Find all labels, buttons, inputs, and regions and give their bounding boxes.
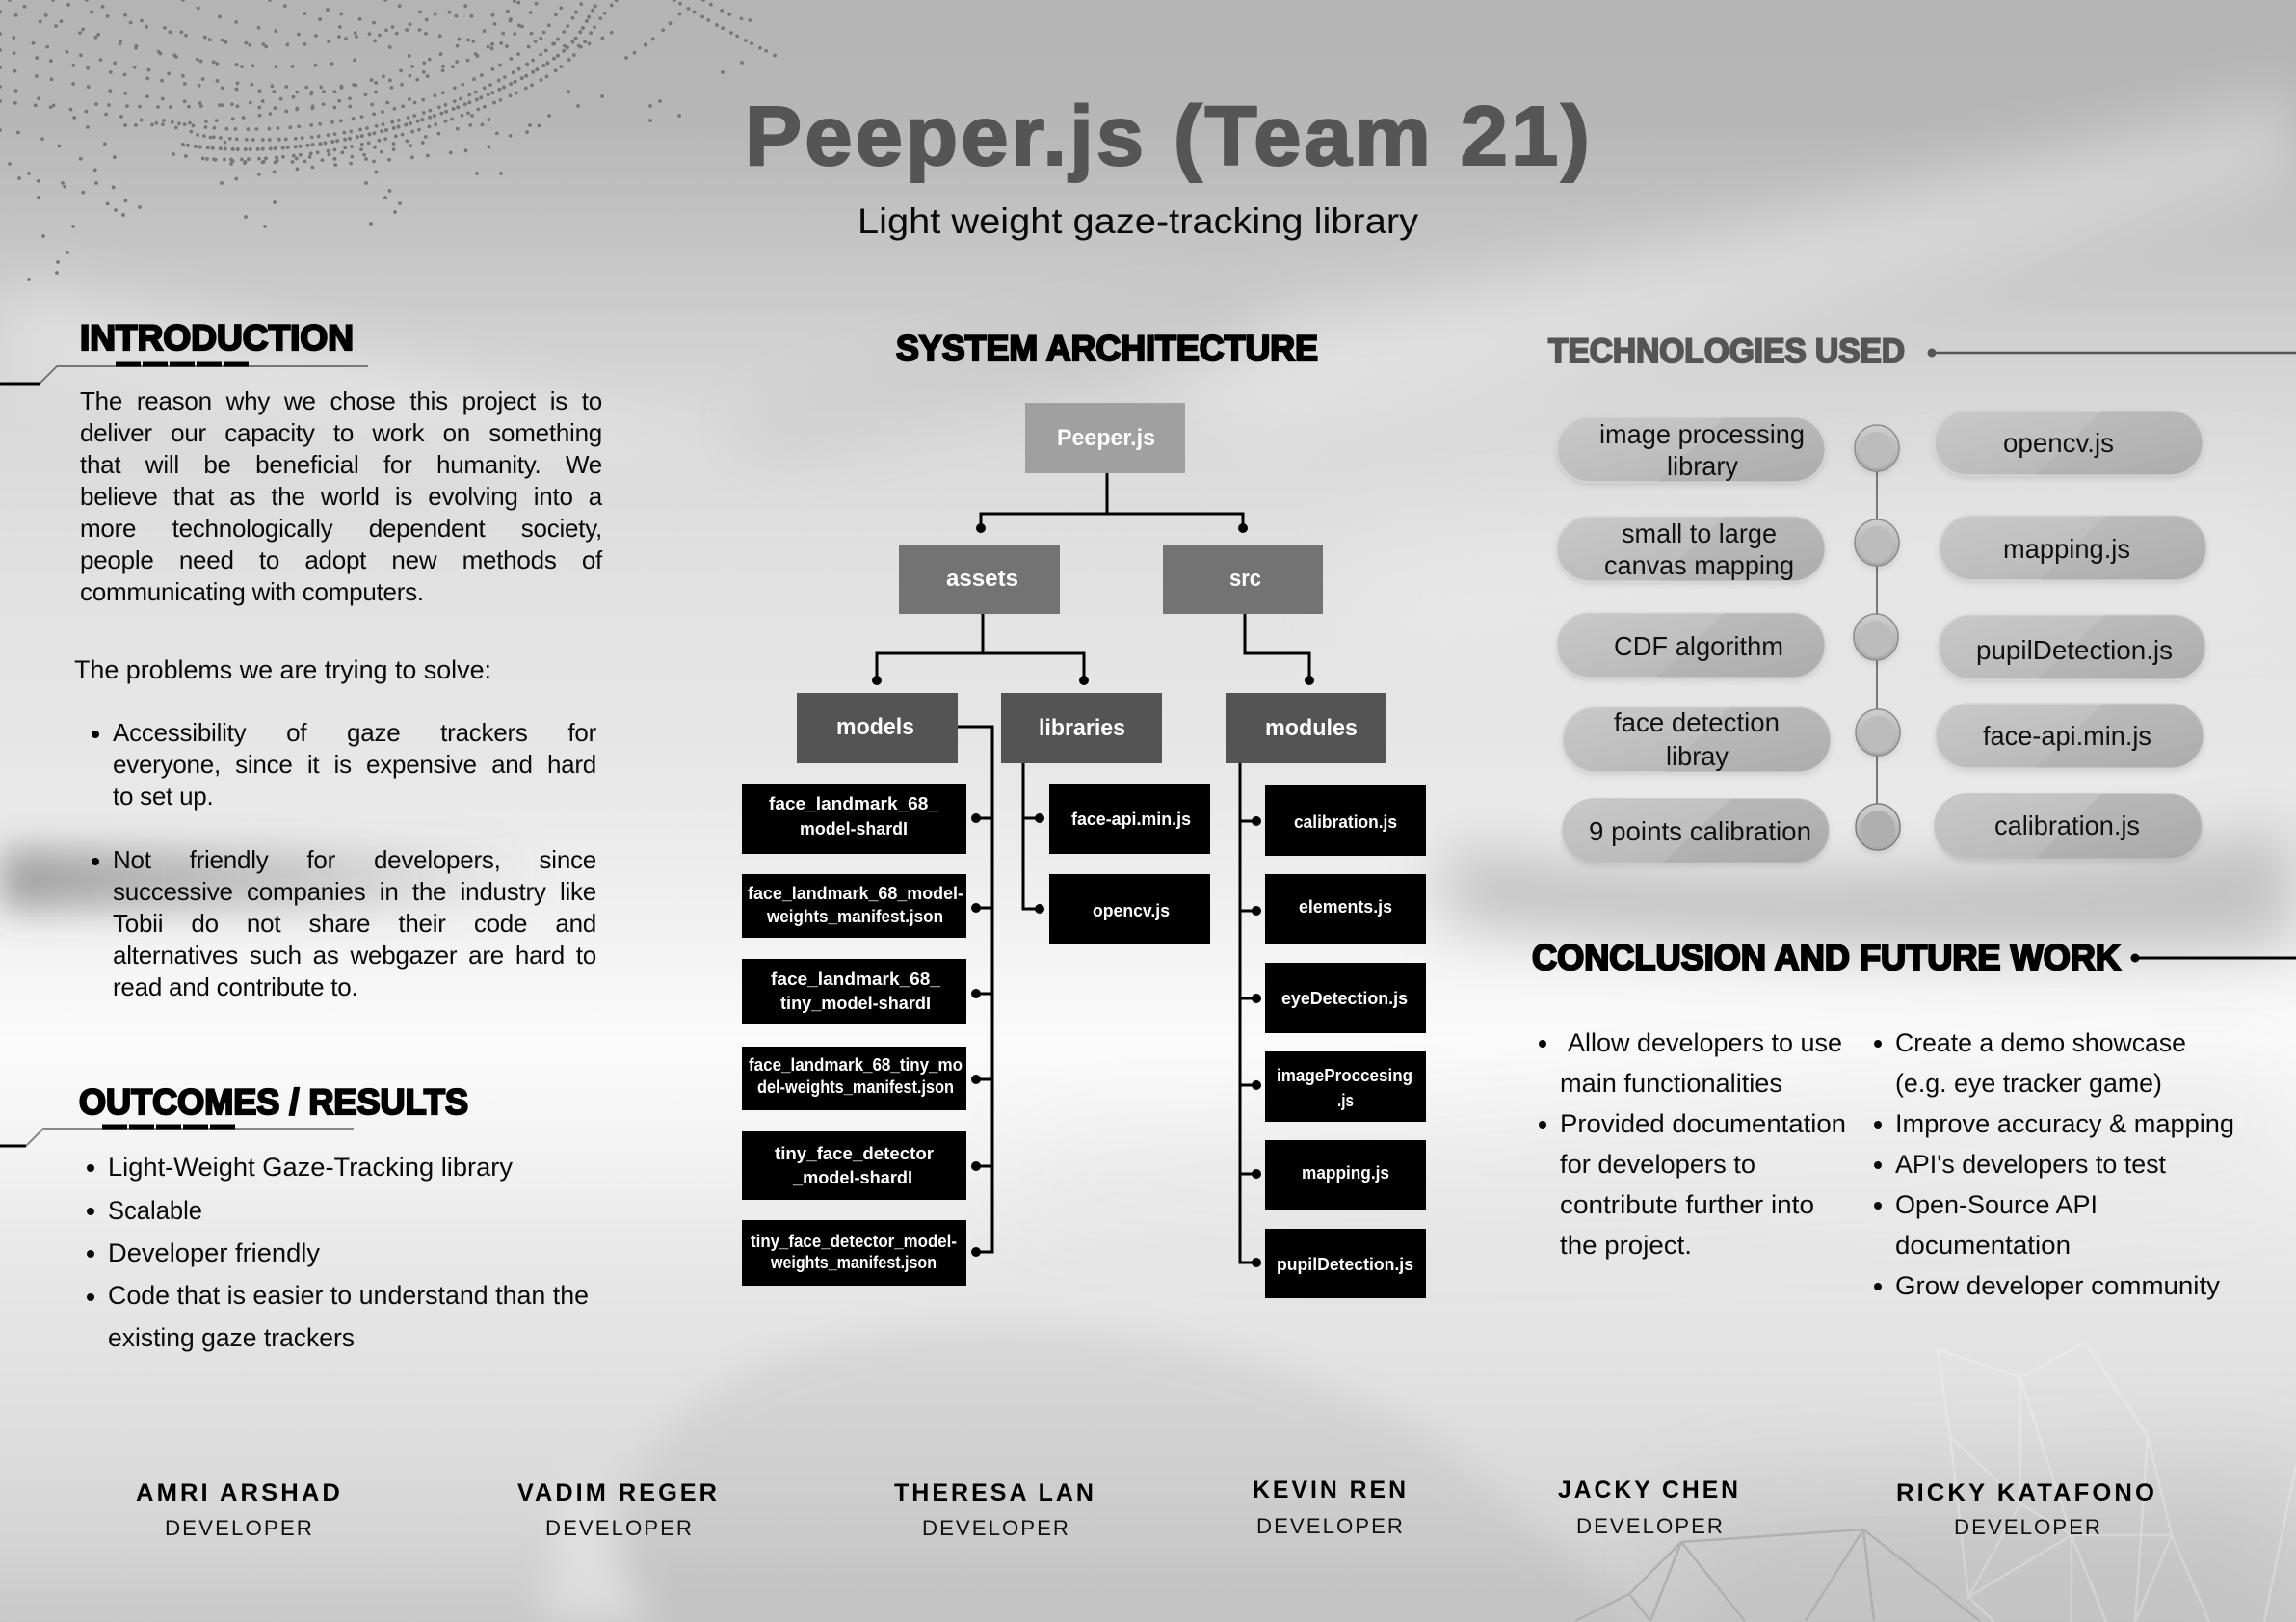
leaf: mapping.js: [1265, 1140, 1426, 1210]
leaf: imageProccesing.js: [1265, 1051, 1426, 1122]
node: src: src: [1229, 566, 1261, 592]
pill: face-api.min.js: [1936, 704, 2204, 768]
node: modules: [1226, 693, 1386, 763]
pill: small to large canvas mapping: canvas mapping: [1604, 550, 1794, 580]
outcomes list: existing gaze trackers: [108, 1323, 355, 1352]
pill: CDF algorithm: [1557, 613, 1825, 678]
team member: Theresa Lan: THERESA LAN: [894, 1479, 1096, 1506]
leaf: tiny_face_detector_model-weights_manifest.json: tiny_face_detector_model-: [751, 1232, 957, 1251]
bullet: not friendly: [92, 858, 99, 865]
outcomes list: Scalable: [108, 1196, 202, 1225]
team member: Amri Arshad: [136, 1479, 343, 1540]
future work list, right column: (e.g. eye tracker game): [1895, 1069, 2162, 1098]
leaf: face_landmark_68_tiny_model-weights_manifest.json: [742, 1047, 966, 1110]
team member: Ricky Katafono: RICKY KATAFONO: [1896, 1479, 2157, 1506]
team member: Ricky Katafono: [1896, 1479, 2157, 1539]
conclusion list, left column: for developers to: [1560, 1150, 1755, 1179]
leaf: face_landmark_68_model-shard1: face_landmark_68_: [769, 794, 939, 813]
heading: outcomes: [0, 1082, 468, 1146]
team member: Jacky Chen: DEVELOPER: [1576, 1514, 1725, 1538]
leaf: pupilDetection.js: pupilDetection.js: [1277, 1255, 1413, 1274]
team member: Kevin Ren: DEVELOPER: [1256, 1514, 1405, 1538]
pill: image processing library: [1557, 417, 1825, 482]
heading: conclusion and future work: CONCLUSION AND FUTURE WORK: [1532, 938, 2121, 977]
problem two text: read and contribute to.: [113, 972, 357, 1001]
pill: calibration.js: [1935, 794, 2202, 859]
outcomes list: Code that is easier to understand than the: [108, 1281, 589, 1310]
heading: outcomes: OUTCOMES / RESULTS: [79, 1082, 468, 1122]
team member: Jacky Chen: JACKY CHEN: [1558, 1476, 1741, 1503]
node: models: models: [836, 714, 914, 740]
particle wave decoration: [0, 0, 776, 279]
introduction paragraph: The reason why we chose this project is to: [80, 386, 602, 415]
timeline knob 3: [1854, 614, 1898, 660]
leaf: tiny_face_detector_model-shard1: [742, 1131, 966, 1200]
team member: Amri Arshad: DEVELOPER: [165, 1516, 314, 1540]
introduction paragraph: people need to adopt new methods of: [80, 545, 602, 574]
team member: Vadim Reger: VADIM REGER: [517, 1479, 720, 1506]
node: assets: [899, 545, 1060, 614]
leaf: elements.js: elements.js: [1299, 897, 1392, 917]
leaf: face-api.min.js: face-api.min.js: [1071, 810, 1191, 829]
team member: Theresa Lan: DEVELOPER: [922, 1516, 1070, 1540]
leaf: tiny_face_detector_model-shard1: _model-shardI: [792, 1168, 912, 1187]
team member: Ricky Katafono: DEVELOPER: [1954, 1515, 2102, 1539]
conclusion list, left column: main functionalities: [1560, 1069, 1782, 1098]
leaf: opencv.js: [1049, 874, 1210, 944]
leaf: calibration.js: [1265, 785, 1426, 856]
problem one text: to set up.: [113, 782, 213, 811]
pill: 9 points calibration: 9 points calibration: [1589, 816, 1811, 846]
timeline knob 4: [1856, 709, 1900, 756]
architecture tree connectors: [872, 473, 1314, 1267]
team member: Theresa Lan: [894, 1479, 1096, 1540]
pill: pupilDetection.js: pupilDetection.js: [1976, 635, 2173, 665]
team member: Kevin Ren: KEVIN REN: [1253, 1476, 1409, 1503]
pill: small to large canvas mapping: small to large: [1622, 519, 1777, 548]
heading: introduction: INTRODUCTION: [80, 318, 354, 358]
future work list, right column: documentation: [1895, 1231, 2071, 1260]
problem one text: Accessibility of gaze trackers for: [113, 718, 596, 747]
leaf: tiny_face_detector_model-weights_manifest.json: [742, 1220, 966, 1286]
outcomes list: Developer friendly: [108, 1238, 321, 1267]
pill: pupilDetection.js: [1939, 615, 2205, 679]
problem two text: Not friendly for developers, since: [113, 845, 596, 874]
problem one text: everyone, since it is expensive and hard: [113, 750, 596, 779]
leaf: face-api.min.js: [1049, 784, 1210, 854]
node: src: [1163, 545, 1323, 614]
leaf: eyeDetection.js: eyeDetection.js: [1281, 989, 1408, 1008]
subtitle: Light weight gaze-tracking library: [858, 201, 1419, 241]
team member: Vadim Reger: [517, 1479, 720, 1540]
leaf: opencv.js: opencv.js: [1093, 901, 1170, 920]
leaf: face_landmark_68_tiny_model-shard1: face_landmark_68_: [771, 970, 941, 989]
node: Peeper.js: [1025, 403, 1185, 473]
timeline knob 1: [1855, 425, 1899, 471]
leaf: face_landmark_68_tiny_model-shard1: tiny_model-shardI: [780, 994, 931, 1013]
leaf: tiny_face_detector_model-weights_manifest.json: weights_manifest.json: [770, 1253, 937, 1272]
heading: technologies used: [1548, 332, 2296, 370]
leaf: face_landmark_68_model-shard1: [742, 784, 966, 854]
leaf: imageProccesing.js: imageProccesing: [1277, 1066, 1412, 1085]
future work list, right column: Grow developer community: [1895, 1271, 2220, 1300]
node: libraries: [1001, 693, 1162, 763]
problem two text: [113, 845, 596, 1001]
team member: Amri Arshad: AMRI ARSHAD: [136, 1479, 343, 1506]
pill: mapping.js: mapping.js: [2003, 534, 2130, 564]
title: Peeper.js (Team 21): [745, 90, 1593, 183]
problem two text: Tobii do not share their code and: [113, 909, 596, 938]
team member: Jacky Chen: [1558, 1476, 1741, 1538]
heading: introduction: [0, 318, 368, 384]
team member: Kevin Ren: [1253, 1476, 1409, 1538]
leaf: imageProccesing.js: .js: [1337, 1091, 1354, 1110]
conclusion list, left column: the project.: [1560, 1231, 1692, 1260]
team member: Vadim Reger: DEVELOPER: [545, 1516, 694, 1540]
leaf: eyeDetection.js: [1265, 963, 1426, 1033]
leaf: face_landmark_68_model-weights_manifest.json: face_landmark_68_model-: [748, 884, 963, 903]
heading: technologies used: TECHNOLOGIES USED: [1548, 332, 1905, 370]
problems lead-in: The problems we are trying to solve:: [74, 655, 491, 684]
pill: face detection libray: face detection: [1614, 707, 1780, 737]
conclusion list, left column: [1539, 1028, 1846, 1260]
pill: face detection libray: [1563, 707, 1831, 772]
node: assets: assets: [946, 566, 1018, 592]
timeline spine: [1876, 448, 1878, 827]
outcomes list: [87, 1153, 589, 1352]
problem two text: successive companies in the industry like: [113, 877, 596, 906]
timeline knob 5: [1856, 804, 1900, 850]
problem one text: [113, 718, 596, 811]
introduction paragraph: believe that as the world is evolving into a: [80, 482, 602, 511]
conclusion list, left column: contribute further into: [1560, 1190, 1814, 1219]
leaf: mapping.js: mapping.js: [1302, 1163, 1389, 1183]
pill: opencv.js: opencv.js: [2003, 428, 2114, 458]
problem two text: alternatives such as webgazer are hard to: [113, 941, 596, 970]
node: models: [797, 693, 958, 763]
pill: small to large canvas mapping: [1557, 517, 1825, 581]
pill: calibration.js: calibration.js: [1994, 811, 2140, 840]
heading: system architecture: SYSTEM ARCHITECTURE: [896, 329, 1318, 368]
pill: face detection libray: libray: [1666, 741, 1729, 771]
leaf: calibration.js: calibration.js: [1294, 812, 1397, 832]
future work list, right column: Open-Source API: [1895, 1190, 2098, 1219]
future work list, right column: Improve accuracy & mapping: [1895, 1109, 2234, 1138]
leaf: face_landmark_68_model-shard1: model-shardI: [800, 819, 908, 838]
introduction paragraph: [80, 386, 603, 606]
future work list, right column: [1874, 1028, 2234, 1300]
pill: mapping.js: [1940, 516, 2206, 580]
leaf: face_landmark_68_tiny_model-weights_manifest.json: del-weights_manifest.json: [757, 1077, 954, 1097]
pill: opencv.js: [1935, 411, 2203, 475]
bullet: accessibility: [92, 731, 99, 738]
leaf: face_landmark_68_model-weights_manifest.json: weights_manifest.json: [766, 907, 943, 926]
pill: face-api.min.js: face-api.min.js: [1983, 721, 2151, 751]
introduction paragraph: more technologically dependent society,: [80, 514, 602, 543]
leaf: face_landmark_68_tiny_model-shard1: [742, 959, 966, 1024]
introduction paragraph: deliver our capacity to work on something: [80, 418, 602, 447]
timeline knob 2: [1855, 519, 1899, 566]
leaf: pupilDetection.js: [1265, 1229, 1426, 1298]
leaf: face_landmark_68_model-weights_manifest.json: [742, 874, 966, 938]
conclusion list, left column: Provided documentation: [1560, 1109, 1846, 1138]
pill: image processing library: library: [1667, 451, 1738, 481]
pill: image processing library: image processing: [1599, 419, 1805, 449]
introduction paragraph: communicating with computers.: [80, 577, 424, 606]
pill: CDF algorithm: CDF algorithm: [1614, 631, 1783, 661]
introduction paragraph: that will be beneficial for humanity. We: [80, 450, 602, 479]
leaf: elements.js: [1265, 874, 1426, 944]
node: modules: modules: [1265, 715, 1358, 741]
future work list, right column: API's developers to test: [1895, 1150, 2166, 1179]
conclusion list, left column: Allow developers to use: [1568, 1028, 1842, 1057]
node: Peeper.js: Peeper.js: [1057, 425, 1155, 451]
leaf: face_landmark_68_tiny_model-weights_manifest.json: face_landmark_68_tiny_mo: [749, 1055, 963, 1075]
node: libraries: libraries: [1039, 715, 1125, 741]
leaf: tiny_face_detector_model-shard1: tiny_face_detector: [775, 1144, 934, 1163]
outcomes list: Light-Weight Gaze-Tracking library: [108, 1153, 514, 1182]
pill: 9 points calibration: [1563, 799, 1829, 863]
polygon mesh decoration, lower right: [1575, 1343, 2296, 1622]
future work list, right column: Create a demo showcase: [1895, 1028, 2186, 1057]
